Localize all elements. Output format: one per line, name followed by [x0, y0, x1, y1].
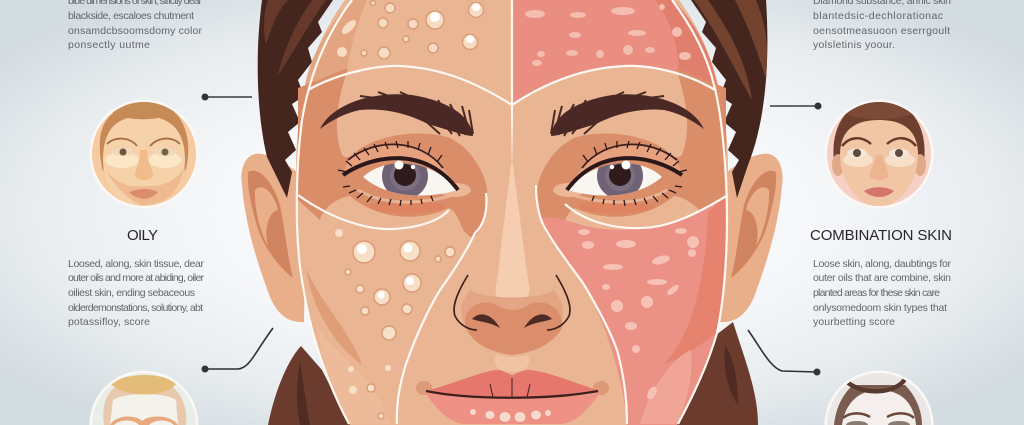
- socket right: [537, 68, 726, 238]
- face skin: [296, 0, 728, 425]
- philtrum: [495, 354, 529, 372]
- left eye: [338, 141, 458, 206]
- spots: oily cheek glints: [357, 244, 414, 298]
- heading: oily: OILY: [127, 227, 158, 244]
- combination text block: outer oils that are combine, skin: [813, 272, 951, 284]
- nose tip: [465, 302, 562, 355]
- combination text block: [813, 258, 952, 328]
- spots: oily forehead: [337, 0, 484, 59]
- nose wings shade: [461, 290, 563, 330]
- right nose wing: [547, 275, 570, 330]
- zone: forehead outer shade: [655, 0, 718, 90]
- connector: bottom left: [202, 328, 273, 372]
- heading: combination skin: COMBINATION SKIN: [810, 227, 952, 244]
- oily text block: outer oils and more at abiding, oiler: [68, 272, 204, 284]
- zone: pink forehead: [513, 0, 718, 103]
- oily text block: olderdemonstations, solutiony, abt: [68, 302, 203, 314]
- left brow: [320, 92, 473, 136]
- portrait: oily skin: [90, 100, 198, 208]
- left nostril: [472, 314, 500, 328]
- top-left text block: [68, 0, 202, 51]
- right nostril: [524, 314, 552, 328]
- right ear: [718, 154, 783, 322]
- combination text block: planted areas for these skin care: [813, 287, 940, 299]
- cheek highlight: [640, 350, 692, 424]
- spots: dry forehead: [525, 4, 691, 66]
- portrait: combination skin: [824, 98, 934, 208]
- top-left text block: blackside, escaloes chutment: [68, 10, 194, 22]
- combination text block: onlysomedoom skin types that: [813, 302, 947, 314]
- forehead shade left: [304, 0, 367, 92]
- combination text block: yourbetting score: [813, 316, 895, 328]
- top-right text block: oensotmeasuoon eserrgoult: [813, 25, 950, 37]
- combination text block: Loose skin, along, daubtings for: [813, 258, 952, 270]
- right brow: [551, 92, 704, 136]
- spots: dry cheek: [578, 228, 699, 401]
- connector: top right: [770, 102, 822, 110]
- portrait: bottom right: [824, 371, 934, 425]
- top-left text block: ponsectly uutme: [68, 39, 150, 51]
- cheek outer strip: [664, 195, 727, 364]
- center line taper: [511, 105, 513, 174]
- top-left text block: onsamdcbsoomsdomy color: [68, 25, 202, 37]
- top-right text block: [813, 0, 951, 51]
- oily text block: Loosed, along, skin tissue, dear: [68, 258, 204, 270]
- lower hair left: [268, 346, 350, 425]
- left ear: [241, 154, 306, 322]
- lips: [416, 370, 609, 424]
- face details: [297, 0, 728, 425]
- spots: oily forehead glints: [430, 3, 480, 43]
- top-right text block: blantedsic-dechlorationac: [813, 10, 943, 22]
- left upper hair: [258, 0, 333, 198]
- oily text block: potassifloy, score: [68, 316, 150, 328]
- connector: bottom right: [748, 330, 820, 376]
- zone: pink cheek: [540, 195, 727, 425]
- top-right text block: yolsletinis yoour.: [813, 39, 895, 51]
- portrait: bottom left: [90, 371, 198, 425]
- left nose wing: [454, 275, 477, 330]
- oily text block: [68, 258, 204, 328]
- right upper hair: [691, 0, 767, 198]
- left jaw shade: [316, 325, 390, 424]
- spots: oily cheek: [335, 229, 455, 419]
- oily text block: oiliest skin, ending sebaceous: [68, 287, 195, 299]
- left cheek side shade: [306, 268, 362, 365]
- nose bridge highlight: [495, 165, 530, 303]
- connector: top left: [202, 94, 252, 100]
- socket left: [298, 68, 487, 238]
- lower hair right: [676, 322, 758, 425]
- right eye: [567, 141, 687, 206]
- white zone lines: [297, 0, 728, 424]
